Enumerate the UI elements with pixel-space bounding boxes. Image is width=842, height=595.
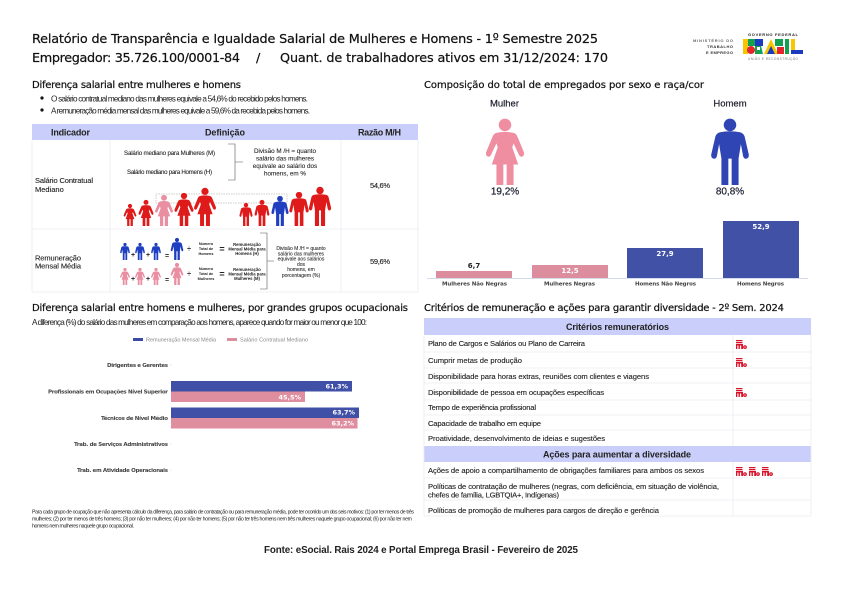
table rows: Proatividade, desenvolvimento de ideias e sugestões (428, 434, 605, 443)
icons: fórmula da remuneração média: porcentagem (%) (282, 273, 321, 279)
icons: fórmula da remuneração média: ÷ (187, 246, 191, 253)
icons: fórmula da remuneração média: + (146, 252, 150, 259)
table rows: Disponibilidade para horas extras, reuniões com clientes e viagens (428, 372, 649, 381)
table header labels (51, 128, 401, 138)
bar chart: sexo e raça/cor: Homens Negros (737, 282, 785, 288)
icons: fórmula da remuneração média: Mulheres (198, 277, 214, 281)
row labels and ratios: 54,6% (370, 181, 390, 190)
panel: tabela de indicadores (32, 124, 418, 292)
bar chart: grupos ocupacionais: 63,2% (331, 420, 354, 428)
definition: salário mediano text: Divisão M /H = quanto (254, 148, 317, 155)
icons: fórmula da remuneração média: dos (297, 262, 306, 268)
table rows: chefes de família, LGBTQIA+, Indígenas) (428, 490, 559, 500)
table header labels: Razão M/H (358, 128, 401, 138)
table rows: Ações de apoio a compartilhamento de obrigações familiares para ambos os sexos (428, 466, 704, 475)
table rows: Tempo de experiência profissional (428, 403, 536, 412)
icons: fórmula da remuneração média: Número (199, 242, 214, 246)
bar chart: grupos ocupacionais (48, 338, 359, 474)
icons: fórmula da remuneração média: equivale aos salários (278, 256, 325, 262)
logo: Ministério do Trabalho e Governo Federal: MINISTÉRIO DO (693, 38, 733, 43)
bar chart: sexo e raça/cor: Homens Não Negros (635, 282, 697, 288)
icons: fórmula da remuneração média (120, 233, 326, 289)
bullet list: resumo salarial (40, 94, 310, 116)
bullet list: resumo salarial: O salário contratual mediano das mulheres equivale a 54,6% do recebido pelos homens. (51, 94, 308, 104)
legend (133, 338, 308, 344)
bar chart: sexo e raça/cor: 12,5 (561, 267, 579, 275)
icons: fórmula da remuneração média: salário das mulheres (278, 252, 325, 258)
icon: mulher 19,2%: 19,2% (491, 186, 519, 198)
section headers: Ações para aumentar a diversidade (543, 450, 691, 460)
title (32, 32, 608, 66)
icons: fórmula da remuneração média: = (219, 244, 225, 254)
icon: mulher 19,2% (486, 98, 524, 198)
icons: fórmula da remuneração média: = (219, 269, 225, 279)
table rows: Políticas de promoção de mulheres para cargos de direção e gerência (428, 506, 660, 515)
icons: marcadores vermelhos (736, 340, 773, 476)
bar chart: grupos ocupacionais: Dirigentes e Gerentes (107, 363, 169, 369)
icons: fórmula da remuneração média: Divisão M /H = quanto (276, 246, 326, 252)
footnote: mulheres; (2) por ter menos de três homens; (3) por não ter mulheres; (4) por não ter homens; (5) por não ter três homens nem três mulheres naquele grupo ocupacional; (6) por não ter nem (32, 516, 412, 522)
title: / (256, 51, 261, 66)
logo: Ministério do Trabalho e Governo Federal: UNIÃO E RECONSTRUÇÃO (748, 56, 799, 61)
bar chart: grupos ocupacionais: Profissionais em Ocupações Nível Superior (48, 388, 168, 396)
icons: fórmula da remuneração média: Mulheres (M) (234, 276, 261, 281)
row labels and ratios: Mediano (35, 185, 64, 194)
icons: fórmula da remuneração média: + (131, 252, 135, 259)
bar chart: sexo e raça/cor: 6,7 (468, 262, 480, 270)
definition: salário mediano text: salário das mulheres (256, 156, 314, 162)
definition: salário mediano text: Salário mediano para Mulheres (M) (124, 150, 215, 157)
icons: fórmula da remuneração média: homens, em (287, 267, 315, 273)
heading: diferença por grandes grupos ocupacionais: Diferença salarial entre homens e mulheres, por grandes grupos ocupacionais (32, 303, 408, 314)
table rows: Capacidade de trabalho em equipe (428, 419, 541, 428)
text: explicação do gráfico: A diferença (%) do salário das mulheres em comparação aos homens, aparece quando for maior ou menor que 100: (32, 318, 367, 327)
icons: fórmula da remuneração média: + (131, 276, 135, 283)
icons: fórmula da remuneração média: ÷ (187, 271, 191, 278)
table rows (428, 339, 719, 515)
icons: pessoas ordenadas por salário (124, 187, 331, 226)
icon: homem 80,8%: Homem (713, 98, 747, 110)
icons: fórmula da remuneração média: Número (199, 267, 214, 271)
footnote: homens nem mulheres naquele grupo ocupacional. (32, 524, 134, 530)
title: Relatório de Transparência e Igualdade Salarial de Mulheres e Homens - 1º Semestre 2025 (32, 32, 598, 47)
definition: salário mediano text: Salário mediano para Homens (H) (127, 169, 212, 176)
table rows: Plano de Cargos e Salários ou Plano de Carreira (428, 339, 586, 348)
icons: fórmula da remuneração média: Remuneração (233, 242, 261, 247)
icons: fórmula da remuneração média: = (165, 253, 169, 260)
table rows: Cumprir metas de produção (428, 356, 522, 365)
bar chart: grupos ocupacionais: 63,7% (332, 408, 355, 416)
icon: mulher 19,2%: Mulher (490, 98, 519, 110)
icons: fórmula da remuneração média: Remuneração (233, 267, 261, 272)
bar chart: sexo e raça/cor: 27,9 (656, 250, 674, 258)
icons: fórmula da remuneração média: + (146, 276, 150, 283)
logo: Ministério do Trabalho e Governo Federal (693, 32, 803, 61)
icons: fórmula da remuneração média: Total de (199, 247, 213, 251)
bar chart: sexo e raça/cor (427, 221, 808, 288)
bar chart: grupos ocupacionais: 45,5% (278, 394, 301, 402)
section headers (543, 322, 691, 460)
row labels and ratios: 59,6% (370, 257, 390, 266)
bullet list: resumo salarial: A remuneração média mensal das mulheres equivale a 59,6% da recebida pelos homens. (51, 106, 310, 116)
source: Fonte: eSocial. Rais 2024 e Portal Emprega Brasil - Fevereiro de 2025 (264, 545, 579, 556)
bar chart: grupos ocupacionais: Trab. em Atividade Operacionais (77, 468, 169, 474)
icons: fórmula da remuneração média: Mensal Média para (228, 272, 266, 276)
icon: homem 80,8% (711, 98, 749, 198)
bar chart: grupos ocupacionais: Técnicos de Nível Médio (101, 415, 168, 422)
heading: diferença salarial entre mulheres e homens: Diferença salarial entre mulheres e homens (32, 80, 241, 91)
logo: Ministério do Trabalho e Governo Federal: GOVERNO FEDERAL (748, 32, 799, 37)
definition: salário mediano text: homens, em % (264, 170, 306, 178)
row labels and ratios (35, 176, 390, 270)
legend: Salário Contratual Mediano (240, 338, 308, 344)
bar chart: grupos ocupacionais: 61,3% (325, 382, 348, 390)
bar chart: sexo e raça/cor: 52,9 (752, 223, 770, 231)
icons: fórmula da remuneração média: Total de (199, 272, 213, 276)
title: Empregador: 35.726.100/0001-84 (32, 51, 240, 66)
heading: composição do total de empregados: Composição do total de empregados por sexo e raça/cor (424, 80, 705, 91)
footnote: Para cada grupo de ocupação que não apresenta cálculo da diferença, para salário de contratação ou para remuneração média, pode ter ocorrido um dos seis motivos: (1) por ter menos de três (32, 510, 414, 516)
definition: salário mediano text: equivale ao salário dos (253, 163, 317, 170)
footnote (32, 510, 414, 530)
bar chart: sexo e raça/cor: Mulheres Não Negras (442, 282, 508, 288)
row labels and ratios: Salário Contratual (35, 176, 93, 185)
panel: tabela de critérios e ações (424, 318, 811, 516)
definition: salário mediano text (124, 144, 317, 180)
table rows: Políticas de contratação de mulheres (negras, com deficiência, em situação de violência, (428, 482, 719, 491)
icons: fórmula da remuneração média: Homens (H) (235, 251, 259, 256)
icons: fórmula da remuneração média: Homens (199, 252, 213, 256)
icons: fórmula da remuneração média: = (165, 277, 169, 284)
title: Quant. de trabalhadores ativos em 31/12/2024: 170 (280, 51, 608, 66)
table header labels: Indicador (51, 128, 90, 138)
icons: fórmula da remuneração média: Mensal Média para (228, 246, 266, 252)
heading: critérios de remuneração: Critérios de remuneração e ações para garantir diversidade - 2º Sem. 2024 (424, 302, 784, 314)
bar chart: grupos ocupacionais: Trab. de Serviços Administrativos (74, 442, 169, 448)
row labels and ratios: Mensal Média (35, 262, 82, 270)
section headers: Critérios remuneratórios (566, 322, 669, 332)
icon: homem 80,8%: 80,8% (716, 186, 744, 198)
legend: Remuneração Mensal Média (146, 338, 217, 344)
logo: Ministério do Trabalho e Governo Federal: TRABALHO (707, 44, 733, 49)
table header labels: Definição (205, 128, 246, 138)
logo: Ministério do Trabalho e Governo Federal: E EMPREGO (706, 50, 733, 55)
table rows: Disponibilidade de pessoa em ocupações específicas (428, 388, 604, 397)
bar chart: sexo e raça/cor: Mulheres Negras (544, 282, 596, 288)
row labels and ratios: Remuneração (35, 254, 81, 262)
